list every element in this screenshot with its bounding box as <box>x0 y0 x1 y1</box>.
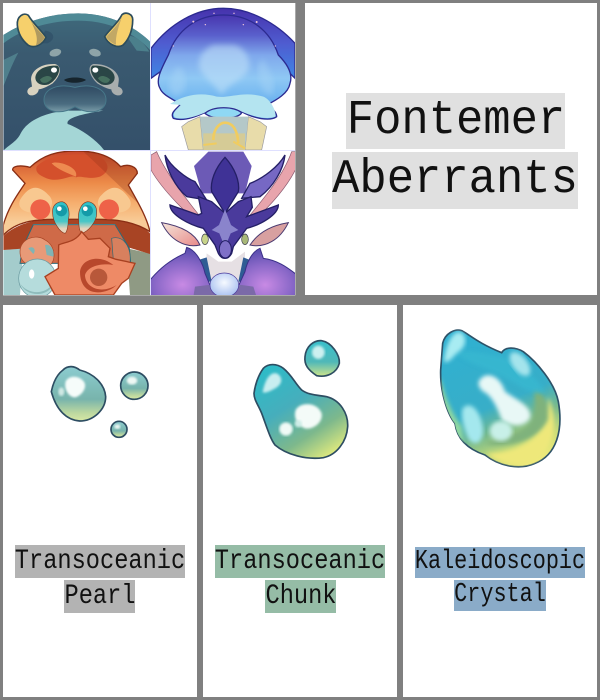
label: Transoceanic Chunk: Chunk <box>265 581 336 612</box>
panel: Kaleidoscopic Crystal <box>403 305 597 697</box>
heading: Fontemer Aberrants: Fontemer <box>346 94 565 148</box>
icon: kaleidoscopic crystal <box>440 329 561 468</box>
icon: orange crab creature portrait <box>3 151 150 298</box>
label: Transoceanic Chunk: Transoceanic <box>215 546 385 577</box>
icon: seal creature portrait <box>3 13 150 150</box>
icon: jellyfish creature portrait <box>151 8 295 150</box>
heading: Fontemer Aberrants <box>332 93 578 209</box>
label: Kaleidoscopic Crystal <box>415 547 585 611</box>
label: Transoceanic Pearl: Transoceanic <box>15 546 185 577</box>
label: Transoceanic Chunk <box>215 545 385 613</box>
panel: title <box>305 3 597 295</box>
label: Transoceanic Pearl <box>15 545 185 613</box>
panel: Transoceanic Pearl <box>3 305 197 697</box>
panel: creature portrait grid <box>3 3 296 296</box>
label: Kaleidoscopic Crystal: Kaleidoscopic <box>415 547 585 577</box>
icon: pearl droplets <box>50 366 149 438</box>
panel: Transoceanic Chunk <box>203 305 397 697</box>
icon: chunk droplets <box>253 340 349 460</box>
icon: purple dragon creature portrait <box>150 152 297 297</box>
label: Transoceanic Pearl: Pearl <box>64 581 135 612</box>
heading: Fontemer Aberrants: Aberrants <box>332 153 578 207</box>
label: Kaleidoscopic Crystal: Crystal <box>454 580 546 610</box>
